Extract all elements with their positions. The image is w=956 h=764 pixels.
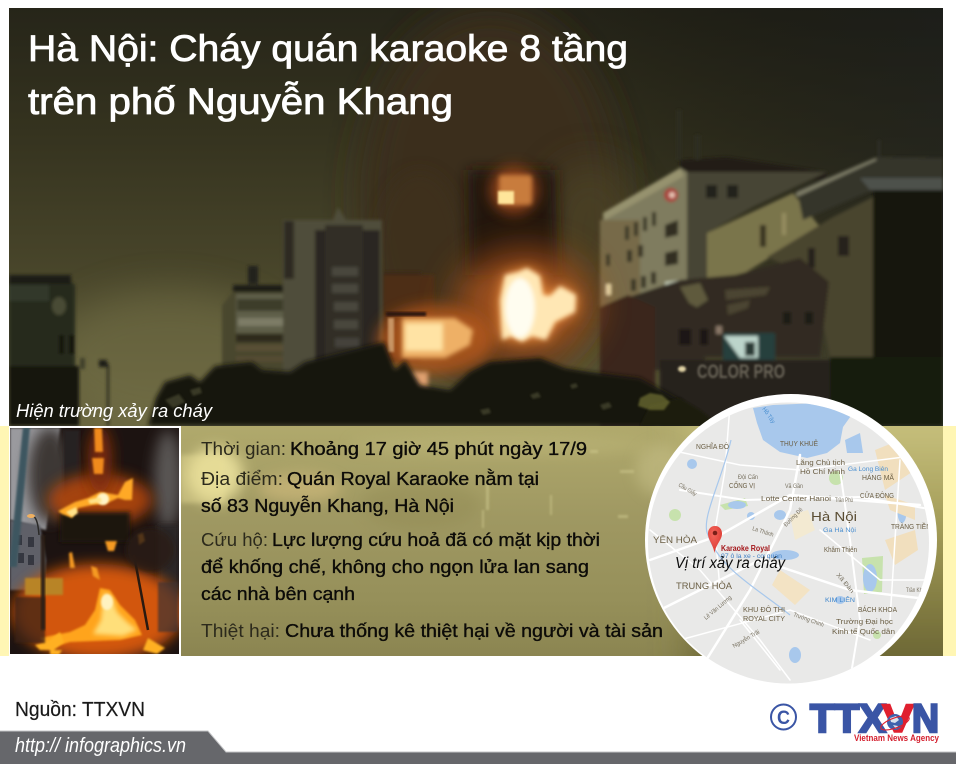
trees xyxy=(148,342,720,426)
map labels: Trần Phú xyxy=(835,498,853,504)
info: rescue: để khống chế, không cho ngọn lửa lan sang xyxy=(201,557,589,577)
map labels: Trường Chinh xyxy=(792,612,824,629)
map labels: BÁCH KHOA xyxy=(858,605,897,614)
map labels: Khâm Thiên xyxy=(824,547,857,554)
map labels: TRÀNG TIỀN xyxy=(891,521,931,531)
map labels: Lotte Center Hanoi xyxy=(761,496,832,503)
map labels: Nguyễn Trãi xyxy=(732,629,761,650)
sign: Color Pro: COLOR PRO xyxy=(697,362,785,383)
main photo: fire scene at night xyxy=(9,8,943,430)
map labels: YÊN HÒA xyxy=(653,535,697,545)
map labels: Trần Khát xyxy=(906,588,926,594)
footer url: http:// infographics.vn xyxy=(15,735,186,757)
map marker label: Karaoke Royal xyxy=(721,544,770,553)
info: location xyxy=(201,468,539,516)
map labels: Lăng Chủ tịch xyxy=(796,459,845,467)
map marker xyxy=(708,526,722,553)
info: location: số 83 Nguyễn Khang, Hà Nội xyxy=(201,495,454,516)
info: rescue xyxy=(201,530,600,604)
fire glows xyxy=(377,166,595,404)
map labels: Ga Long Biên xyxy=(848,467,888,473)
map circle xyxy=(645,394,937,686)
info: time: Thời gian: xyxy=(201,439,286,459)
info: damage: Chưa thống kê thiệt hại về người và tài sản xyxy=(285,621,663,641)
map labels: Hà Nội xyxy=(811,509,857,524)
info: rescue: Lực lượng cứu hoả đã có mặt kịp thời xyxy=(272,530,600,550)
map labels: Kinh tế Quốc dân xyxy=(832,627,895,636)
map labels: CỬA ĐÔNG xyxy=(860,491,894,500)
map labels: Xã Đàn xyxy=(834,572,854,595)
map labels: Trường Đại học xyxy=(836,619,894,626)
map labels: Đội Cấn xyxy=(738,475,758,481)
title: Hà Nội: Cháy quán karaoke 8 tầng xyxy=(28,28,628,69)
map marker label: 97 ô la xe - cơ quan xyxy=(721,554,782,560)
map labels: HÀNG MÃ xyxy=(862,473,894,482)
source: Nguồn: TTXVN xyxy=(15,699,145,721)
info: damage: Thiệt hại: xyxy=(201,621,280,641)
info: rescue: Cứu hộ: xyxy=(201,530,268,550)
inset photo: building on fire xyxy=(9,426,183,660)
logo: TTXVN: TTX xyxy=(810,697,886,741)
title: trên phố Nguyễn Khang xyxy=(28,81,453,122)
logo: TTXVN: V xyxy=(882,697,914,741)
copyright icon: C xyxy=(777,708,790,729)
logo: TTXVN: N xyxy=(912,697,939,741)
lakes and parks xyxy=(669,403,918,663)
roads xyxy=(650,405,935,680)
map labels: Lê Văn Lương xyxy=(703,595,733,622)
map labels: Hồ Tây xyxy=(760,407,776,425)
dark burning tower xyxy=(468,170,558,275)
info: rescue: các nhà bên cạnh xyxy=(201,584,355,604)
yellow info band xyxy=(0,426,956,656)
map labels xyxy=(653,407,931,650)
info: location: Quán Royal Karaoke nằm tại xyxy=(287,468,539,489)
map labels: Cầu Giấy xyxy=(677,483,697,498)
map labels: ROYAL CITY xyxy=(743,616,785,623)
map labels: KHU ĐÔ THỊ xyxy=(743,605,785,614)
info: time: Khoảng 17 giờ 45 phút ngày 17/9 xyxy=(290,439,587,459)
map labels: TRUNG HÒA xyxy=(676,581,732,591)
map labels: Đường Đê xyxy=(783,507,805,528)
map labels: Ga Hà Nội xyxy=(823,528,856,534)
logo: TTXVN xyxy=(771,697,940,744)
info: time xyxy=(201,439,587,459)
map caption: Vị trí xảy ra cháy xyxy=(675,555,786,572)
map labels: KIM LIÊN xyxy=(825,595,855,604)
right buildings xyxy=(680,157,827,180)
title xyxy=(28,28,628,122)
photo caption: Hiện trường xảy ra cháy xyxy=(16,401,213,421)
info: location: Địa điểm: xyxy=(201,469,283,489)
map labels: Hồ Chí Minh xyxy=(800,467,845,476)
map labels: CỐNG VỊ xyxy=(729,480,755,490)
map labels: Vă Gần xyxy=(785,484,803,490)
logo: TTXVN: Vietnam News Agency xyxy=(854,733,940,744)
footer bar xyxy=(0,731,956,764)
map labels: La Thành xyxy=(751,526,774,539)
map labels: THỤY KHUÊ xyxy=(780,439,818,448)
map marker label xyxy=(721,544,782,560)
map labels: NGHĨA ĐÔ xyxy=(696,442,730,451)
copyright icon xyxy=(771,704,796,730)
